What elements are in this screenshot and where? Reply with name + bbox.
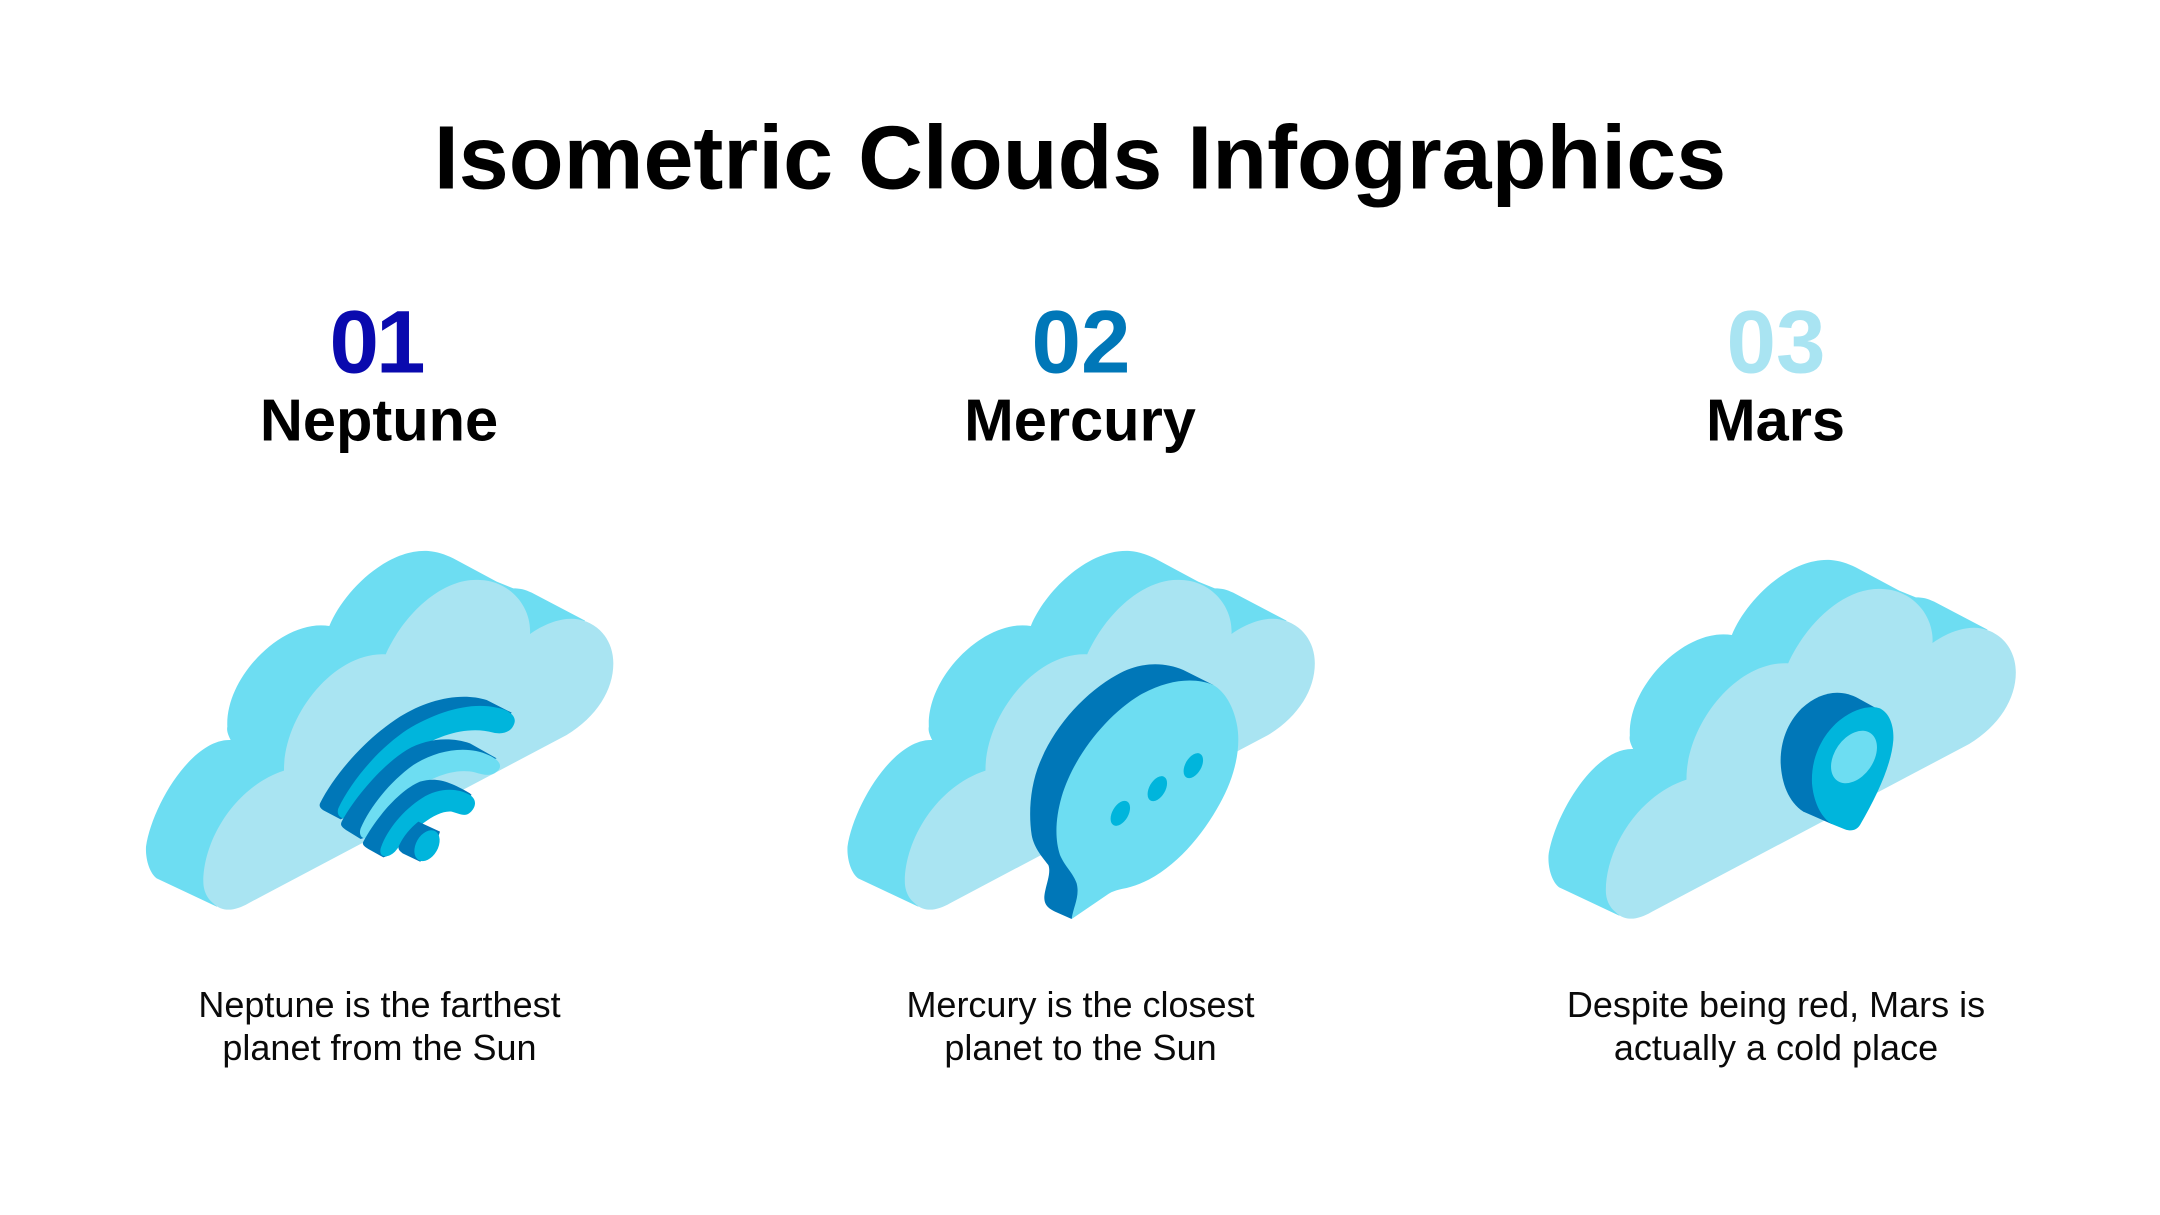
description: Mercury is the closest <box>906 984 1255 1025</box>
icon: chat bubble <box>1030 664 1238 919</box>
icon: wifi <box>320 697 515 866</box>
panel: 02 Mercury <box>847 292 1315 1068</box>
icon: location pin <box>1781 693 1893 830</box>
heading: Neptune: Neptune <box>260 386 498 454</box>
panel: 01 Neptune <box>146 292 613 1068</box>
illustration: cloud with pin <box>1548 560 2016 919</box>
heading: Mercury: Mercury <box>964 386 1196 454</box>
cloud back <box>146 551 585 907</box>
description: actually a cold place <box>1614 1027 1938 1068</box>
number 03: 03 <box>1726 292 1826 392</box>
description <box>198 984 561 1068</box>
number 02: 02 <box>1032 292 1130 392</box>
description: planet to the Sun <box>944 1027 1217 1068</box>
cloud front <box>905 580 1315 910</box>
chat dots <box>1107 750 1207 829</box>
description: planet from the Sun <box>222 1027 537 1068</box>
title: Isometric Clouds Infographics <box>434 108 1726 208</box>
description <box>1567 984 1985 1068</box>
cloud back <box>1548 560 1987 916</box>
panel: 03 Mars <box>1548 292 2016 1068</box>
cloud front <box>1606 589 2016 919</box>
description: Neptune is the farthest <box>198 984 561 1025</box>
description: Despite being red, Mars is <box>1567 984 1985 1025</box>
cloud front <box>203 580 613 910</box>
heading: Mars: Mars <box>1706 386 1845 454</box>
number 01: 01 <box>330 292 424 392</box>
illustration: cloud with wifi <box>146 551 613 910</box>
cloud back <box>847 551 1286 907</box>
illustration: cloud with chat bubble <box>847 551 1315 910</box>
description <box>906 984 1255 1068</box>
